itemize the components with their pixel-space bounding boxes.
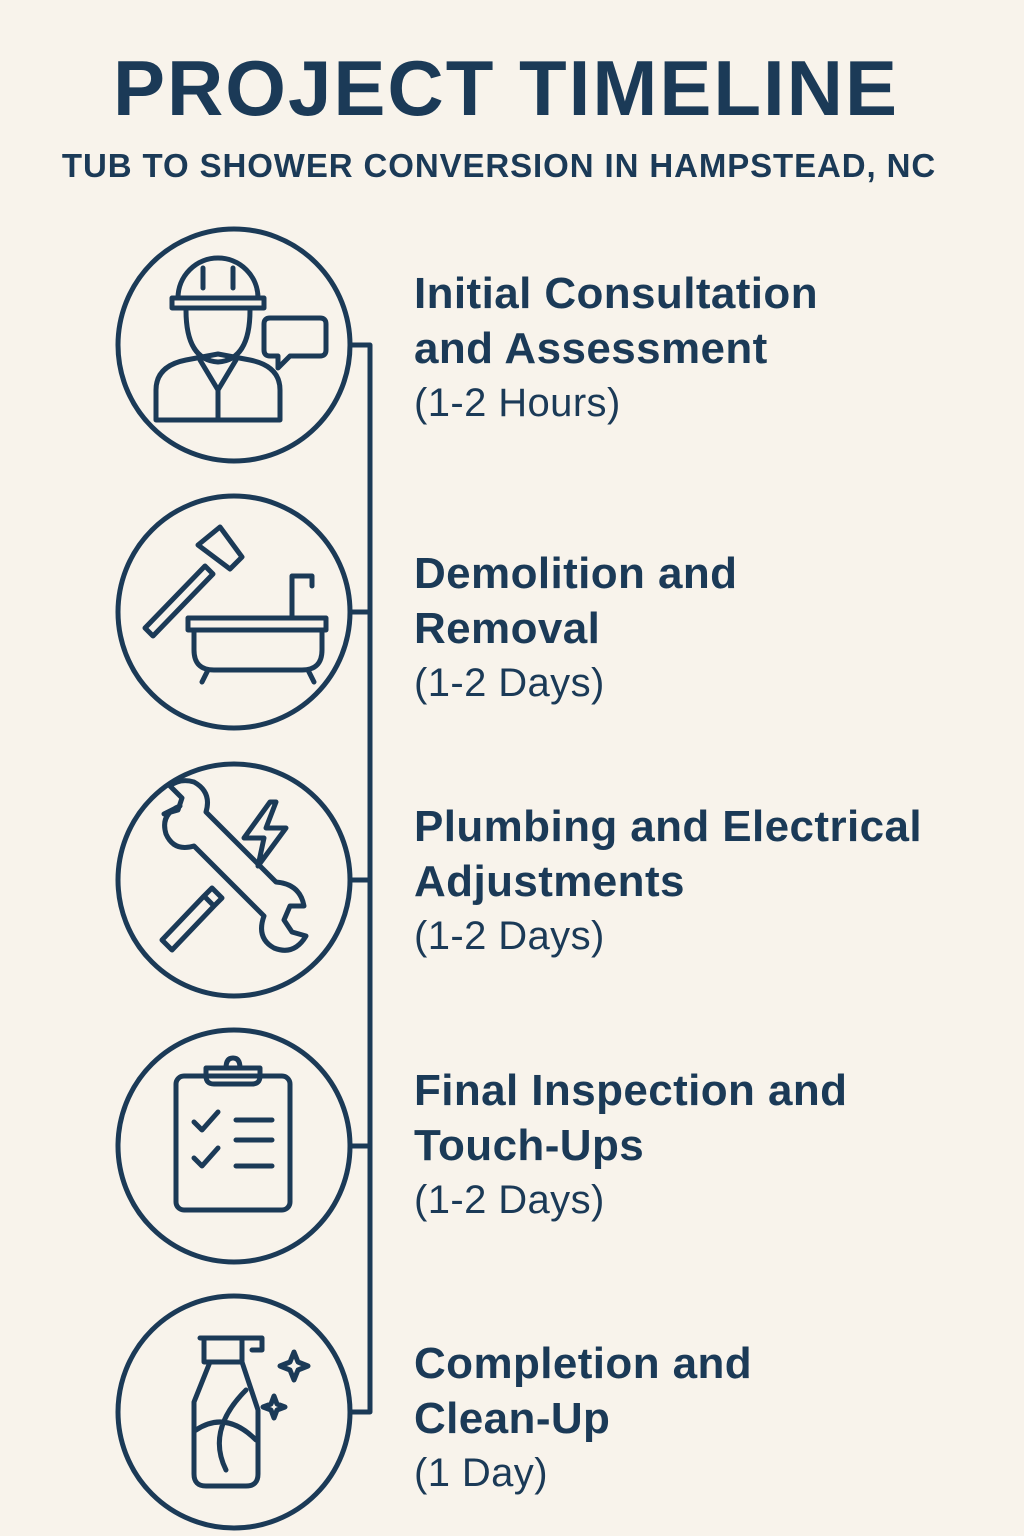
title: PROJECT TIMELINE xyxy=(113,44,899,132)
step 2 text: (1-2 Days) xyxy=(414,661,605,705)
timeline line xyxy=(351,345,370,1412)
step 3 text: Adjustments xyxy=(414,857,685,906)
subtitle: TUB TO SHOWER CONVERSION IN HAMPSTEAD, NC xyxy=(62,147,936,184)
step 1 text: and Assessment xyxy=(414,324,768,373)
step 5 text xyxy=(414,1339,752,1495)
step 5 text: (1 Day) xyxy=(414,1451,548,1495)
step 1 text: (1-2 Hours) xyxy=(414,381,621,425)
step 1 text xyxy=(414,269,818,425)
step 2 text xyxy=(414,549,737,705)
step 4 text: Touch-Ups xyxy=(414,1121,644,1170)
step 2 text: Demolition and xyxy=(414,549,737,598)
step 5 text: Clean-Up xyxy=(414,1394,610,1443)
step 2 text: Removal xyxy=(414,604,600,653)
step 4 text: Final Inspection and xyxy=(414,1066,847,1115)
step 3 text: Plumbing and Electrical xyxy=(414,802,922,851)
step 4 text: (1-2 Days) xyxy=(414,1178,605,1222)
step 3 text xyxy=(414,802,922,958)
step 5 text: Completion and xyxy=(414,1339,752,1388)
icon: clipboard xyxy=(118,1030,350,1262)
icon: wrench and bolt xyxy=(118,764,350,996)
step 4 text xyxy=(414,1066,847,1222)
step 3 text: (1-2 Days) xyxy=(414,914,605,958)
step 1 text: Initial Consultation xyxy=(414,269,818,318)
icon: spray bottle xyxy=(118,1296,350,1528)
icon: hammer and tub xyxy=(118,496,350,728)
icon: consultant xyxy=(118,229,350,461)
